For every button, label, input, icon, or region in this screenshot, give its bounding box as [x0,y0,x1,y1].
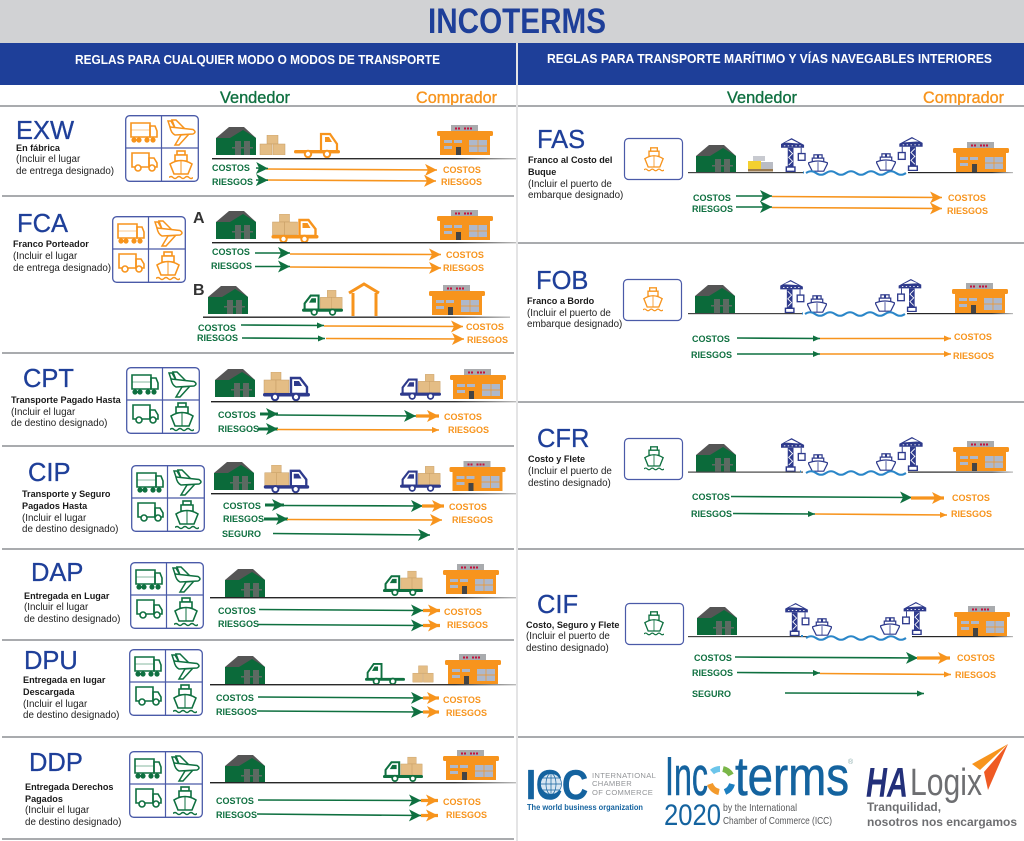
chart: cost and risk arrows [692,193,988,216]
panel: CFR [528,425,1013,519]
chart: cost and risk arrows: COSTOS [444,607,482,617]
icon: warehouse [695,285,735,313]
heading: DAP [31,559,83,587]
icon: store [437,125,493,155]
icon: right ship [880,618,900,634]
heading: FAS [537,126,585,154]
icon: warehouse [214,462,254,490]
panel: DAP [24,559,516,630]
chart: cost, risk and insurance arrows: RIESGOS [692,668,733,678]
description: (Incluir el puerto de [527,308,611,319]
logo: ICC: The world business organization [527,802,643,812]
logo: Incoterms 2020: terms [735,745,849,807]
chart: cost and risk arrows: COSTOS [954,332,992,342]
icon: ship mode [624,280,682,320]
icon: warehouse [216,127,256,155]
title: INCOTERMS [428,2,606,41]
description: de destino designado) [22,524,118,535]
icon: loaded truck [383,571,423,595]
description: (Incluir el puerto de [526,631,610,642]
description [528,155,623,201]
icon: right crane [898,137,923,171]
chart: cost, risk and insurance arrows: COSTOS [694,653,732,663]
icon: boxes [260,135,285,155]
icon: boxes [413,666,433,682]
chart: cost and risk arrows: RIESGOS [446,810,487,820]
heading: DPU [24,647,78,675]
icon: water [801,636,906,640]
logo: Incoterms 2020: ® [848,758,854,766]
logo: HA Logix [866,744,1017,829]
description: Entregada en lugar [23,675,106,685]
chart: cost and risk arrows: RIESGOS [212,177,253,187]
logo: HA Logix: Tranquilidad, [867,800,941,814]
icon: transport modes [130,650,202,715]
icon: transport modes [131,563,203,628]
description [25,782,121,828]
seller and buyer headings: Vendedor [220,88,290,107]
icon: empty truck [365,664,405,684]
chart: cost and risk arrows: RIESGOS [692,204,733,214]
icon: left crane [781,138,805,171]
icon: store [952,283,1008,313]
icon: loaded truck at destination [400,466,441,491]
icon: right crane [903,602,926,635]
description: Franco Porteador [13,239,89,249]
description: Costo y Flete [528,454,585,464]
description: Franco a Bordo [527,296,595,306]
chart: cost, risk and insurance arrows: SEGURO [692,689,731,699]
description: Transporte y Seguro [22,489,111,499]
icon: left ship [812,619,832,635]
chart: cost, risk and insurance arrows: COSTOS [957,653,995,663]
description: embarque designado) [528,190,623,201]
chart: cost and risk arrows: COSTOS [212,163,250,173]
description: Costo, Seguro y Flete [526,620,619,630]
icon: warehouse [225,755,265,783]
description: de entrega designado) [16,166,114,177]
chart: cost and risk arrows: COSTOS [444,412,482,422]
icon: terminal shed [349,284,379,316]
icon: store [445,654,501,684]
icon: cargo on dock [748,156,773,172]
icon: empty truck [294,134,340,157]
icon: left ship [808,455,828,471]
icon: right crane [898,437,923,471]
chart: cost, risk and insurance arrows: SEGURO [222,529,261,539]
chart: cost and risk arrows [218,410,489,435]
header: right column [518,43,1024,85]
heading: EXW [16,117,74,145]
description [11,395,122,429]
chart: cost and risk arrows: RIESGOS [691,350,732,360]
description: de destino designado) [11,418,107,429]
panel: CIP [22,459,516,539]
description: embarque designado) [527,319,622,330]
description: (Incluir el lugar [11,407,76,418]
icon: warehouse [696,444,736,472]
icon: globe [540,774,562,794]
description: Transporte Pagado Hasta [11,395,122,405]
icon: transport modes [130,752,202,817]
chart: cost and risk arrows: COSTOS [218,410,256,420]
logo: HA Logix: nosotros nos encargamos [867,815,1017,829]
icon: water [802,312,905,316]
chart: cost and risk arrows [216,693,487,718]
chart: cost, risk and insurance arrows: RIESGOS [223,514,264,524]
heading: FCA [17,210,68,238]
description: (Incluir el lugar [25,805,90,816]
option A: RIESGOS [443,263,484,273]
logo: ICC: OF COMMERCE [592,788,653,797]
icon: loaded truck [264,465,309,492]
icon: transport modes [132,466,204,531]
chart: cost and risk arrows: COSTOS [443,797,481,807]
chart: cost and risk arrows: COSTOS [952,493,990,503]
seller and buyer headings: Vendedor [727,88,797,107]
icon: transport modes [126,116,198,181]
option B: RIESGOS [197,333,238,343]
icon: arrow mark [972,744,1008,790]
icon: ship mode [626,604,684,644]
seller and buyer headings: Comprador [416,88,497,107]
description: (Incluir el puerto de [528,179,612,190]
option B [193,282,510,345]
chart: cost and risk arrows [691,492,992,519]
logo: Incoterms 2020: 2020 [664,799,721,832]
icon: warehouse [225,656,265,684]
chart: cost and risk arrows: COSTOS [692,334,730,344]
icon: store [953,441,1009,471]
icon: right ship [876,154,896,170]
header: left column: REGLAS PARA CUALQUIER MODO O MODOS DE TRANSPORTE [75,53,440,67]
option A: A [193,210,205,227]
chart: cost and risk arrows: RIESGOS [446,708,487,718]
icon: store [450,369,506,399]
logo: Incoterms 2020: Inc [665,745,708,807]
chart: cost, risk and insurance arrows: COSTOS [449,502,487,512]
chart: cost and risk arrows: RIESGOS [691,509,732,519]
chart: cost and risk arrows: RIESGOS [953,351,994,361]
icon: warehouse [225,569,265,597]
chart: cost and risk arrows: COSTOS [693,193,731,203]
icon: loaded truck [383,757,423,781]
chart: cost, risk and insurance arrows: COSTOS [223,501,261,511]
icon: store [429,285,485,315]
heading: FOB [536,267,588,295]
icon: left crane [785,603,809,636]
chart: cost and risk arrows: RIESGOS [216,707,257,717]
description: (Incluir el lugar [24,602,89,613]
chart: cost and risk arrows: COSTOS [948,193,986,203]
chart: cost, risk and insurance arrows [692,653,996,699]
option B: COSTOS [466,322,504,332]
chart: cost and risk arrows: COSTOS [443,165,481,175]
description: de destino designado) [25,817,121,828]
description: de entrega designado) [13,263,111,274]
description: de destino designado) [23,710,119,721]
option A: RIESGOS [211,261,252,271]
description: Entregada en Lugar [24,591,110,601]
icon: transport modes [127,368,199,433]
heading: CPT [23,365,74,393]
icon: store [443,750,499,780]
chart: cost and risk arrows: COSTOS [216,796,254,806]
chart: cost and risk arrows: COSTOS [218,606,256,616]
icon: right ship [876,454,896,470]
icon: ship mode [624,138,682,180]
icon: store [443,564,499,594]
icon: water [800,471,906,475]
description: En fábrica [16,143,61,153]
icon: right crane [898,279,921,312]
chart: cost and risk arrows [216,796,487,820]
icon: left crane [781,438,805,471]
icon: warehouse [215,369,255,397]
logo: HA Logix: HA [866,759,908,806]
option B: RIESGOS [467,335,508,345]
icon: right ship [875,295,895,311]
seller and buyer headings: Comprador [923,88,1004,107]
description [528,454,612,489]
icon: store [450,461,506,491]
logo: Incoterms 2020: by the International [723,802,797,814]
chart: cost and risk arrows: RIESGOS [218,424,259,434]
chart: cost and risk arrows [691,332,994,361]
description: (Incluir el lugar [22,513,87,524]
description: (Incluir el puerto de [528,466,612,477]
icon: loaded truck at destination [400,374,441,399]
description: destino designado) [526,643,609,654]
logo: HA Logix: Logix [910,762,982,804]
description [24,591,120,625]
chart: cost, risk and insurance arrows [222,501,493,539]
panel: CPT [11,365,516,435]
logo: ICC: CHAMBER [592,779,632,788]
panel: DPU [23,647,516,721]
icon: left ship [807,296,827,312]
logo: ICC [526,761,656,812]
icon: loaded truck [272,214,318,242]
panel: FCA [13,210,516,345]
description [22,489,118,535]
panel: FOB [527,267,1013,361]
logo: ICC: INTERNATIONAL [592,771,656,780]
icon: warehouse [696,145,736,173]
option B: B [193,282,205,299]
icon: loaded truck [263,372,310,400]
chart: cost and risk arrows: RIESGOS [216,810,257,820]
option A: COSTOS [212,247,250,257]
header: left column [0,43,516,85]
icon: store [953,142,1009,172]
heading: CIP [28,459,71,487]
icon: left crane [780,280,804,313]
panel: FAS [528,126,1013,216]
option A [193,210,516,273]
header: right column: REGLAS PARA TRANSPORTE MARÍTIMO Y VÍAS NAVEGABLES INTERIORES [547,51,992,66]
logo: ICC: ICC [526,761,588,808]
option A: COSTOS [446,250,484,260]
chart: cost and risk arrows: RIESGOS [448,425,489,435]
seller and buyer headings [220,88,1004,107]
description: Pagados [25,794,63,804]
icon: store [954,606,1010,636]
icon: warehouse [216,211,256,239]
icon: water [803,171,906,175]
icon: ship mode [624,438,682,480]
option B: COSTOS [198,323,236,333]
chart: cost and risk arrows: RIESGOS [951,509,992,519]
title banner [0,0,1024,43]
icon: store [437,210,493,240]
heading: CIF [537,591,578,619]
chart: cost and risk arrows: RIESGOS [447,620,488,630]
description: de destino designado) [24,614,120,625]
chart: cost, risk and insurance arrows: RIESGOS [955,670,996,680]
icon: warehouse [697,607,737,635]
description: Entregada Derechos [25,782,113,792]
description [527,296,622,330]
chart: cost and risk arrows [218,606,488,630]
description: (Incluir el lugar [16,154,81,165]
logo: Incoterms 2020: Chamber of Commerce (ICC) [723,815,832,827]
heading: CFR [537,425,589,453]
description: (Incluir el lugar [23,699,88,710]
chart: cost and risk arrows: COSTOS [692,492,730,502]
panel: EXW [16,116,516,187]
chart: cost and risk arrows: COSTOS [443,695,481,705]
chart: cost and risk arrows [212,163,482,187]
icon: transport modes [113,217,185,282]
description: Franco al Costo del [528,155,612,165]
description [23,675,119,721]
chart: cost and risk arrows: RIESGOS [441,177,482,187]
icon: left ship [808,155,828,171]
chart: cost and risk arrows: COSTOS [216,693,254,703]
description: Descargada [23,687,76,697]
description [13,239,111,274]
description [16,143,114,177]
panel: CIF [526,591,1013,699]
description: Pagados Hasta [22,501,88,511]
panel: DDP [25,749,516,828]
chart: cost and risk arrows: RIESGOS [947,206,988,216]
heading: DDP [29,749,83,777]
description: Buque [528,167,556,177]
logo: Incoterms 2020 [664,745,854,832]
description [526,620,619,654]
description: destino designado) [528,478,611,489]
description: (Incluir el lugar [13,251,78,262]
icon: loaded green truck [302,290,343,315]
chart: cost, risk and insurance arrows: RIESGOS [452,515,493,525]
icon: coloured ring [710,769,732,792]
icon: warehouse [208,286,248,314]
chart: cost and risk arrows: RIESGOS [218,619,259,629]
